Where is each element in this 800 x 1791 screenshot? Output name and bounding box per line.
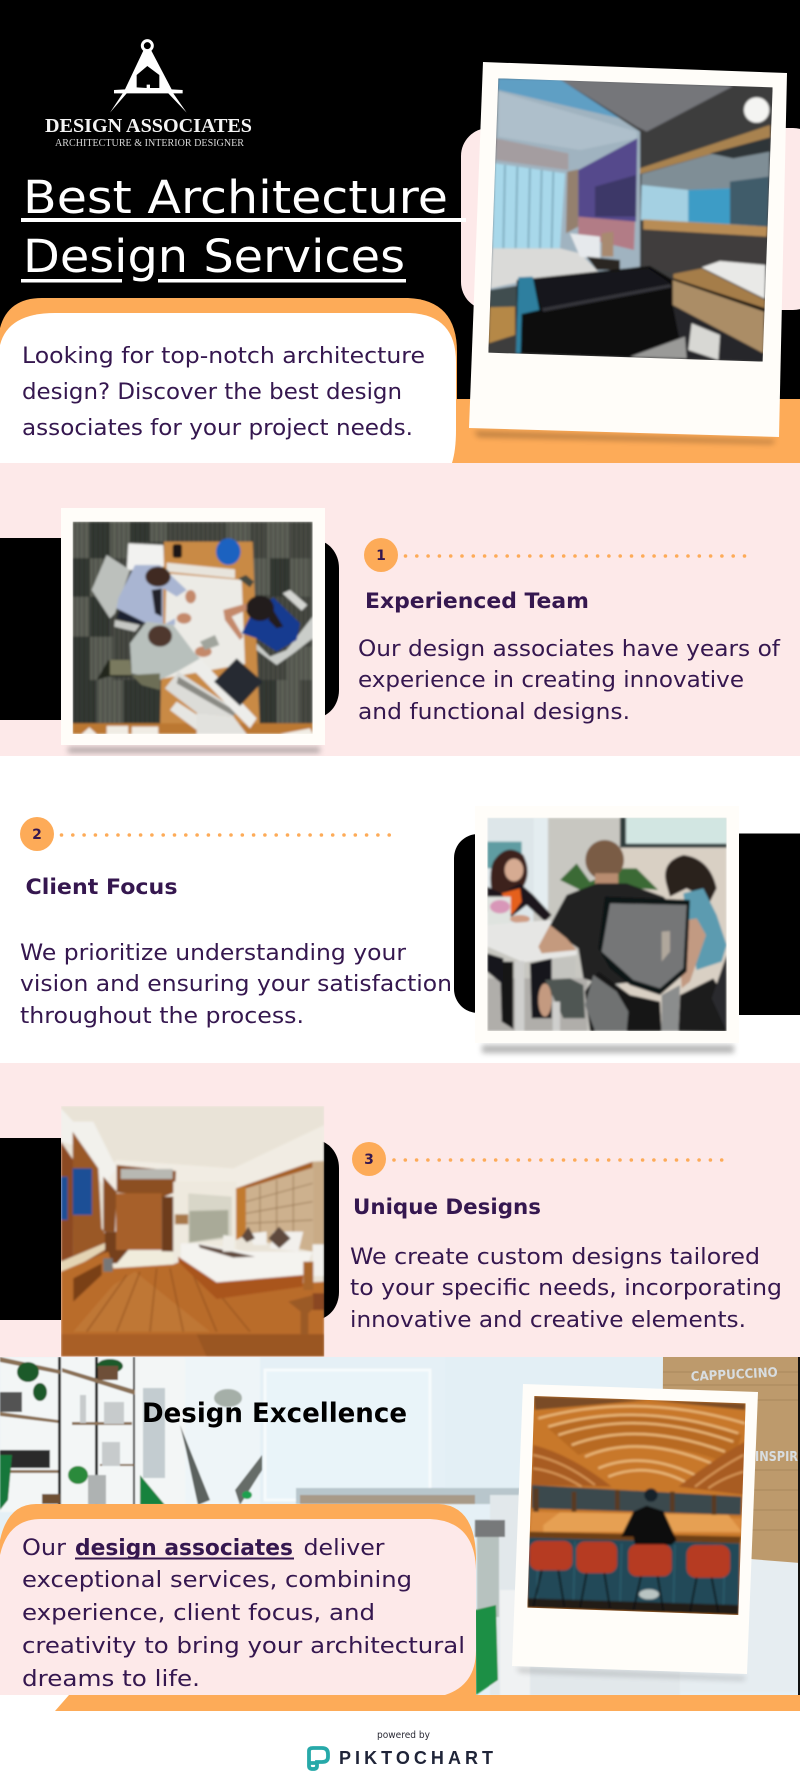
icon: piktochart logo xyxy=(309,1748,328,1769)
summary text: experience, client focus, and xyxy=(22,1601,375,1626)
wood sign xyxy=(662,1357,800,1563)
polaroid: team meeting xyxy=(61,508,325,753)
panel: section 4 design excellence xyxy=(0,1357,800,1711)
number badge xyxy=(352,1142,386,1176)
black backing xyxy=(0,1138,339,1320)
text: unique designs: to your specific needs, incorporating xyxy=(350,1276,782,1301)
orange strip xyxy=(55,1695,800,1711)
photo: hotel bedroom xyxy=(61,1106,324,1357)
logo tagline: ARCHITECTURE & INTERIOR DESIGNER xyxy=(55,138,244,149)
number badge xyxy=(20,817,54,851)
powered by: powered by xyxy=(377,1730,430,1741)
heading: design excellence: Design Excellence xyxy=(142,1398,407,1429)
orange panel xyxy=(0,1504,476,1695)
summary text: dreams to life. xyxy=(22,1667,200,1692)
panel: section 1 experienced team xyxy=(0,463,800,756)
logo xyxy=(45,41,252,149)
step 1 header xyxy=(364,538,745,572)
number badge xyxy=(364,538,398,572)
summary text: Our xyxy=(22,1536,67,1561)
heading: unique designs: Unique Designs xyxy=(353,1195,541,1219)
title: Best Architecture xyxy=(23,171,448,224)
summary text: deliver xyxy=(304,1536,386,1561)
intro text: associates for your project needs. xyxy=(22,416,413,441)
summary text: creativity to bring your architectural xyxy=(22,1634,465,1659)
intro panel xyxy=(0,313,456,463)
intro text xyxy=(22,344,425,441)
pink backing shape xyxy=(461,128,800,310)
intro text: Looking for top-notch architecture xyxy=(22,344,425,369)
photo: bar xyxy=(527,1396,746,1615)
piktochart wordmark: PIKTOCHART xyxy=(339,1748,493,1768)
photo: bathroom xyxy=(488,78,773,362)
panel: section 3 unique designs xyxy=(0,1063,800,1357)
summary text: exceptional services, combining xyxy=(22,1568,412,1593)
orange strip xyxy=(452,399,800,463)
summary text xyxy=(22,1536,465,1692)
text: experienced team: Our design associates have years of xyxy=(358,637,781,662)
text: unique designs xyxy=(350,1245,782,1333)
text: client focus: vision and ensuring your satisfaction xyxy=(20,972,452,997)
photo: overhead meeting xyxy=(73,522,313,734)
text: client focus xyxy=(20,941,452,1029)
number badge: 2 xyxy=(32,827,42,843)
photo: client meeting xyxy=(487,818,727,1032)
black backing xyxy=(0,538,339,720)
polaroid: bar xyxy=(512,1384,758,1680)
number badge: 1 xyxy=(376,548,386,564)
text: experienced team xyxy=(358,637,781,725)
panel: section 2 client focus xyxy=(0,756,800,1063)
text: experienced team: experience in creating innovative xyxy=(358,668,744,693)
icon: compass and house xyxy=(110,41,187,113)
text: client focus: throughout the process. xyxy=(20,1004,304,1029)
logo name: DESIGN ASSOCIATES xyxy=(45,115,252,137)
sign text: CAPPUCCINO xyxy=(690,1365,778,1385)
text: unique designs: innovative and creative elements. xyxy=(350,1308,746,1333)
text: experienced team: and functional designs. xyxy=(358,700,630,725)
title: Design Services xyxy=(23,230,405,283)
number badge: 3 xyxy=(364,1152,374,1168)
panel: header xyxy=(0,0,800,463)
polaroid: client meeting xyxy=(475,806,739,1053)
intro text: design? Discover the best design xyxy=(22,380,402,405)
polaroid: bathroom xyxy=(469,60,787,444)
black backing xyxy=(454,834,800,1015)
summary text: design associates xyxy=(75,1536,293,1561)
title xyxy=(21,171,466,283)
footer: powered by piktochart xyxy=(309,1730,493,1769)
summary panel xyxy=(0,1519,476,1695)
heading: client focus: Client Focus xyxy=(26,875,178,899)
heading: experienced team: Experienced Team xyxy=(365,589,589,613)
step 2 header xyxy=(20,817,400,851)
orange panel xyxy=(0,298,457,463)
text: client focus: We prioritize understanding your xyxy=(20,941,407,966)
photo: cafe background xyxy=(0,1357,800,1695)
text: unique designs: We create custom designs tailored xyxy=(350,1245,760,1270)
step 3 header xyxy=(352,1142,733,1176)
